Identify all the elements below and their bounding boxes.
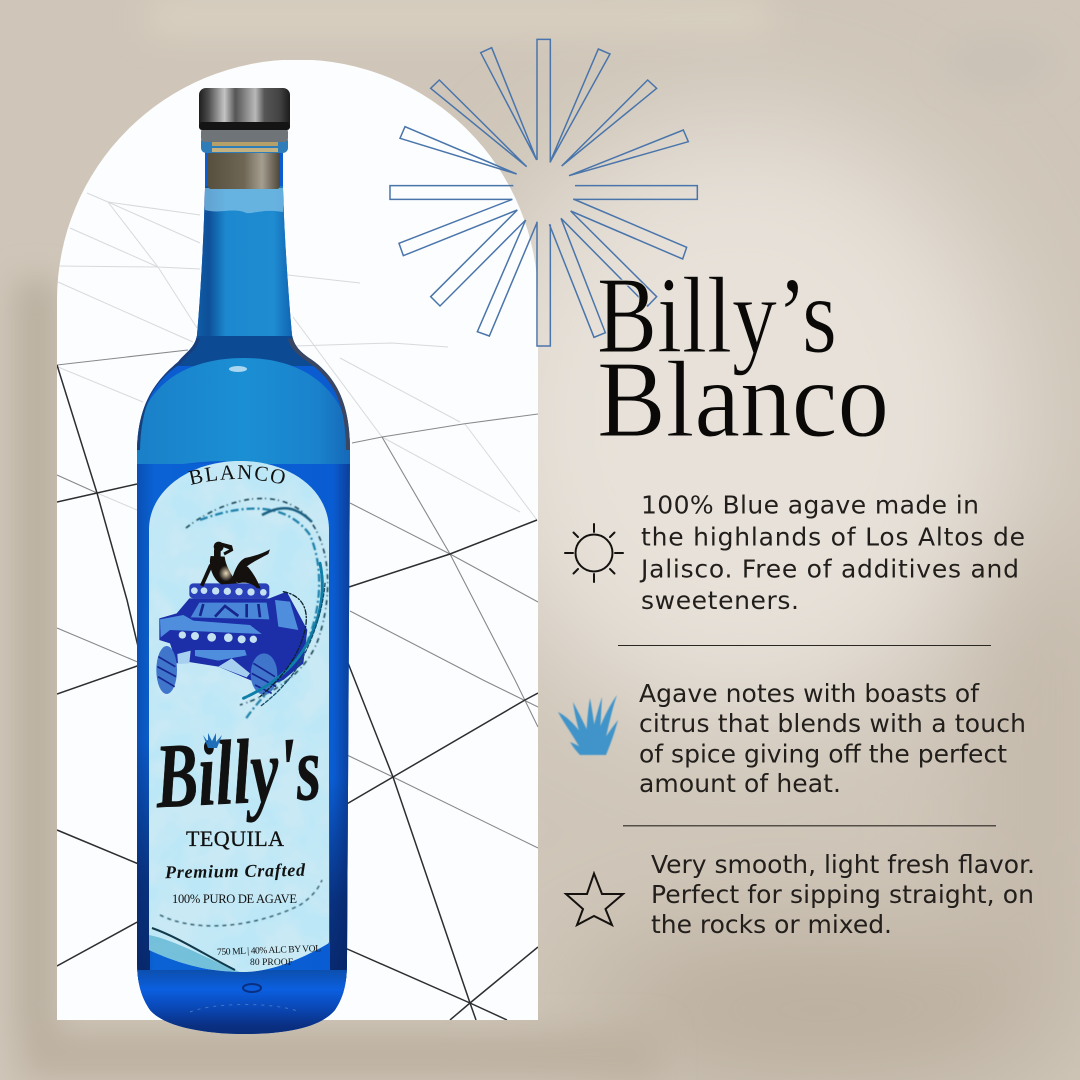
label volume and proof: 750 ML | 40% ALC BY VOL: [217, 944, 321, 958]
label volume and proof: 80 PROOF: [250, 958, 293, 968]
brand wordmark: [152, 717, 323, 827]
bottle label: BLANCO: [188, 465, 285, 485]
text: serving suggestion: [651, 850, 1035, 939]
label tagline: Premium Crafted: [164, 860, 306, 882]
title: [597, 255, 889, 460]
brand wordmark: Billy's: [152, 717, 323, 827]
text: tasting notes: [639, 679, 1026, 798]
text: tasting notes: of spice giving off the perfect: [639, 740, 1007, 768]
text: tasting notes: amount of heat.: [639, 769, 841, 798]
bottle glass: [130, 150, 360, 1040]
water splash: [160, 498, 328, 926]
bottle: [137, 88, 350, 1034]
label bottom wave: [149, 935, 240, 972]
text: origin: Jalisco. Free of additives and: [639, 554, 1019, 584]
wordmark agave: [203, 733, 222, 748]
text: origin: 100% Blue agave made in: [641, 490, 979, 520]
truck wheels: [156, 646, 277, 695]
bottle label: [149, 461, 329, 972]
text: tasting notes: Agave notes with boasts of: [639, 679, 980, 708]
truck: [156, 583, 307, 695]
splash over truck: [243, 563, 325, 707]
cork seal: [208, 152, 280, 189]
label agave line: 100% PURO DE AGAVE: [172, 892, 297, 906]
arch panel with geodesic floor photo: [57, 60, 538, 1020]
icon: sun: [565, 524, 623, 582]
icon: star: [566, 874, 623, 925]
dark floor lines: [57, 365, 538, 1020]
rider silhouette: [200, 542, 270, 589]
icon: agave plant: [558, 695, 618, 755]
text: serving suggestion: the rocks or mixed.: [651, 910, 892, 939]
text: origin: [639, 490, 1025, 615]
truck and rider: [156, 542, 325, 707]
metal cap: [199, 88, 290, 130]
text: serving suggestion: Perfect for sipping straight, on: [651, 880, 1034, 909]
label volume and proof: [217, 944, 321, 968]
faint upper floor lines: [58, 193, 537, 520]
title: Blanco: [597, 339, 889, 460]
sunburst outline: [390, 39, 697, 346]
text: tasting notes: citrus that blends with a touch: [639, 709, 1026, 738]
text: serving suggestion: Very smooth, light fresh flavor.: [651, 850, 1035, 879]
label word: Tequila: TEQUILA: [186, 826, 284, 851]
title: Billy’s: [597, 255, 837, 376]
text: origin: sweeteners.: [641, 586, 799, 615]
label word: Blanco: [172, 479, 304, 491]
mid floor lines: [57, 350, 538, 848]
neck ring: [201, 128, 288, 153]
text: origin: the highlands of Los Altos de: [641, 522, 1025, 552]
